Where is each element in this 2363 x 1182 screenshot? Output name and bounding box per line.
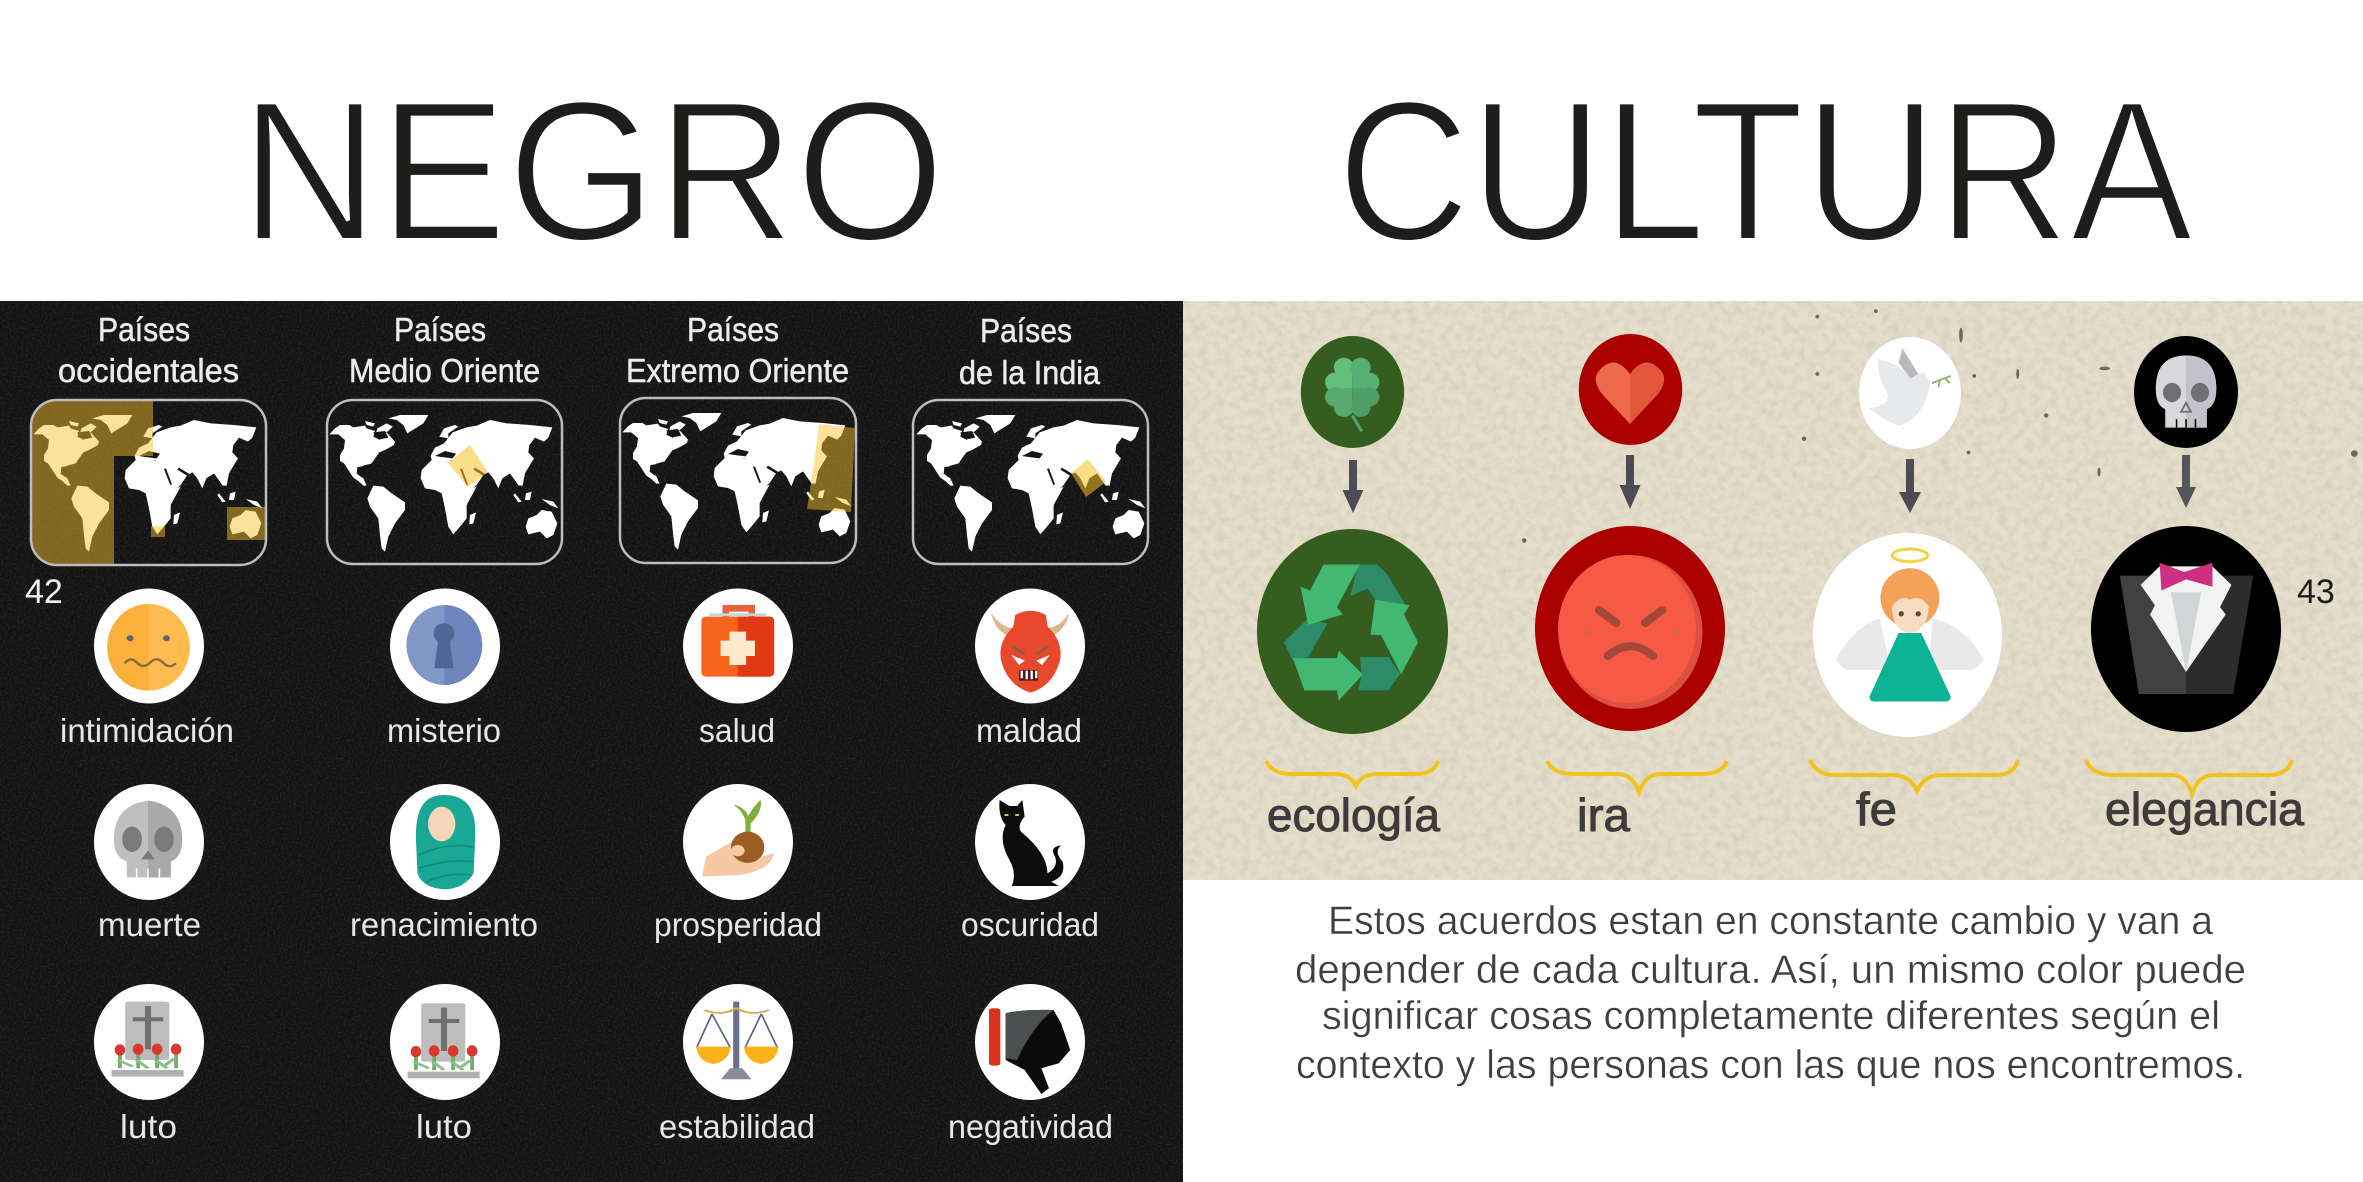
icon: negatividad	[975, 984, 1085, 1100]
label: luto 2: luto	[416, 1108, 472, 1145]
text block: explicación: Estos acuerdos estan en constante cambio y van a	[1328, 899, 2214, 943]
icon: trébol	[1301, 336, 1404, 448]
heading: Países Medio Oriente	[349, 311, 540, 389]
map: extremo oriente	[620, 398, 856, 563]
heading: Países Medio Oriente: Medio Oriente	[349, 352, 540, 389]
title: CULTURA: CULTURA	[1337, 60, 2194, 283]
heading: Países occidentales	[58, 311, 239, 389]
icon: calavera	[2134, 336, 2238, 448]
icon: misterio	[390, 588, 500, 704]
brace 3	[1810, 760, 2018, 791]
page number 42: 42	[25, 573, 63, 611]
heading: Países de la India: de la India	[959, 354, 1101, 391]
brace 2	[1547, 761, 1727, 792]
heading: Países occidentales: occidentales	[58, 352, 239, 389]
panel: negro en paises	[0, 301, 1183, 1182]
text block: explicación: depender de cada cultura. Así, un mismo color puede	[1295, 948, 2246, 992]
map: occidentales	[31, 400, 266, 565]
brace 1	[1266, 761, 1438, 786]
label: fe: fe	[1856, 783, 1897, 835]
label: ecología: ecología	[1267, 789, 1440, 841]
label: ira: ira	[1577, 789, 1630, 841]
arrow 2	[1620, 455, 1640, 509]
icon: estabilidad	[683, 984, 793, 1100]
label: negatividad: negatividad	[948, 1108, 1113, 1145]
heading: Países de la India	[959, 312, 1101, 391]
map: india	[913, 400, 1148, 564]
arrow 3	[1899, 459, 1921, 513]
icon: ángel	[1813, 533, 2002, 737]
page number 43: 43	[2297, 573, 2335, 611]
icon: corazón	[1579, 334, 1682, 445]
label: prosperidad: prosperidad	[654, 906, 822, 943]
brace 4	[2086, 760, 2292, 794]
label: elegancia: elegancia	[2105, 783, 2304, 835]
label: maldad: maldad	[976, 712, 1082, 749]
icon: esmoquin	[2091, 526, 2281, 732]
label: misterio: misterio	[387, 712, 501, 749]
label: salud: salud	[699, 712, 775, 749]
icon: luto 1	[94, 984, 204, 1100]
text block: explicación: significar cosas completamente diferentes según el	[1322, 994, 2220, 1038]
icon: prosperidad	[683, 784, 793, 900]
heading: Países de la India: Países	[980, 312, 1072, 349]
label: renacimiento: renacimiento	[350, 906, 538, 943]
arrow 1	[1342, 460, 1364, 513]
label: estabilidad: estabilidad	[659, 1108, 815, 1145]
label: oscuridad: oscuridad	[961, 906, 1099, 943]
title: NEGRO: NEGRO	[240, 60, 945, 283]
heading: Países Extremo Oriente: Extremo Oriente	[626, 352, 849, 389]
icon: maldad	[975, 588, 1085, 704]
label: luto 1: luto	[120, 1108, 177, 1145]
heading: Países Extremo Oriente: Países	[687, 311, 779, 348]
icon: cara enojada	[1535, 526, 1725, 731]
heading: Países occidentales: Países	[98, 311, 190, 348]
icon: renacimiento	[390, 784, 500, 900]
heading: Países Medio Oriente: Países	[394, 311, 486, 348]
panel: papel con simbolos	[1183, 301, 2363, 880]
icon: oscuridad	[975, 784, 1085, 900]
icon: reciclaje	[1257, 529, 1448, 734]
label: muerte: muerte	[98, 906, 201, 943]
text block: explicación	[1295, 899, 2246, 1087]
label: intimidación: intimidación	[60, 712, 234, 749]
icon: intimidación	[94, 588, 204, 704]
icon: paloma	[1859, 337, 1961, 449]
arrow 4	[2176, 455, 2196, 508]
text block: explicación: contexto y las personas con las que nos encontremos.	[1296, 1043, 2245, 1087]
heading: Países Extremo Oriente	[626, 311, 849, 389]
icon: luto 2	[390, 984, 500, 1100]
map: medio oriente	[327, 400, 562, 564]
icon: muerte	[94, 784, 204, 900]
icon: salud	[683, 588, 793, 704]
